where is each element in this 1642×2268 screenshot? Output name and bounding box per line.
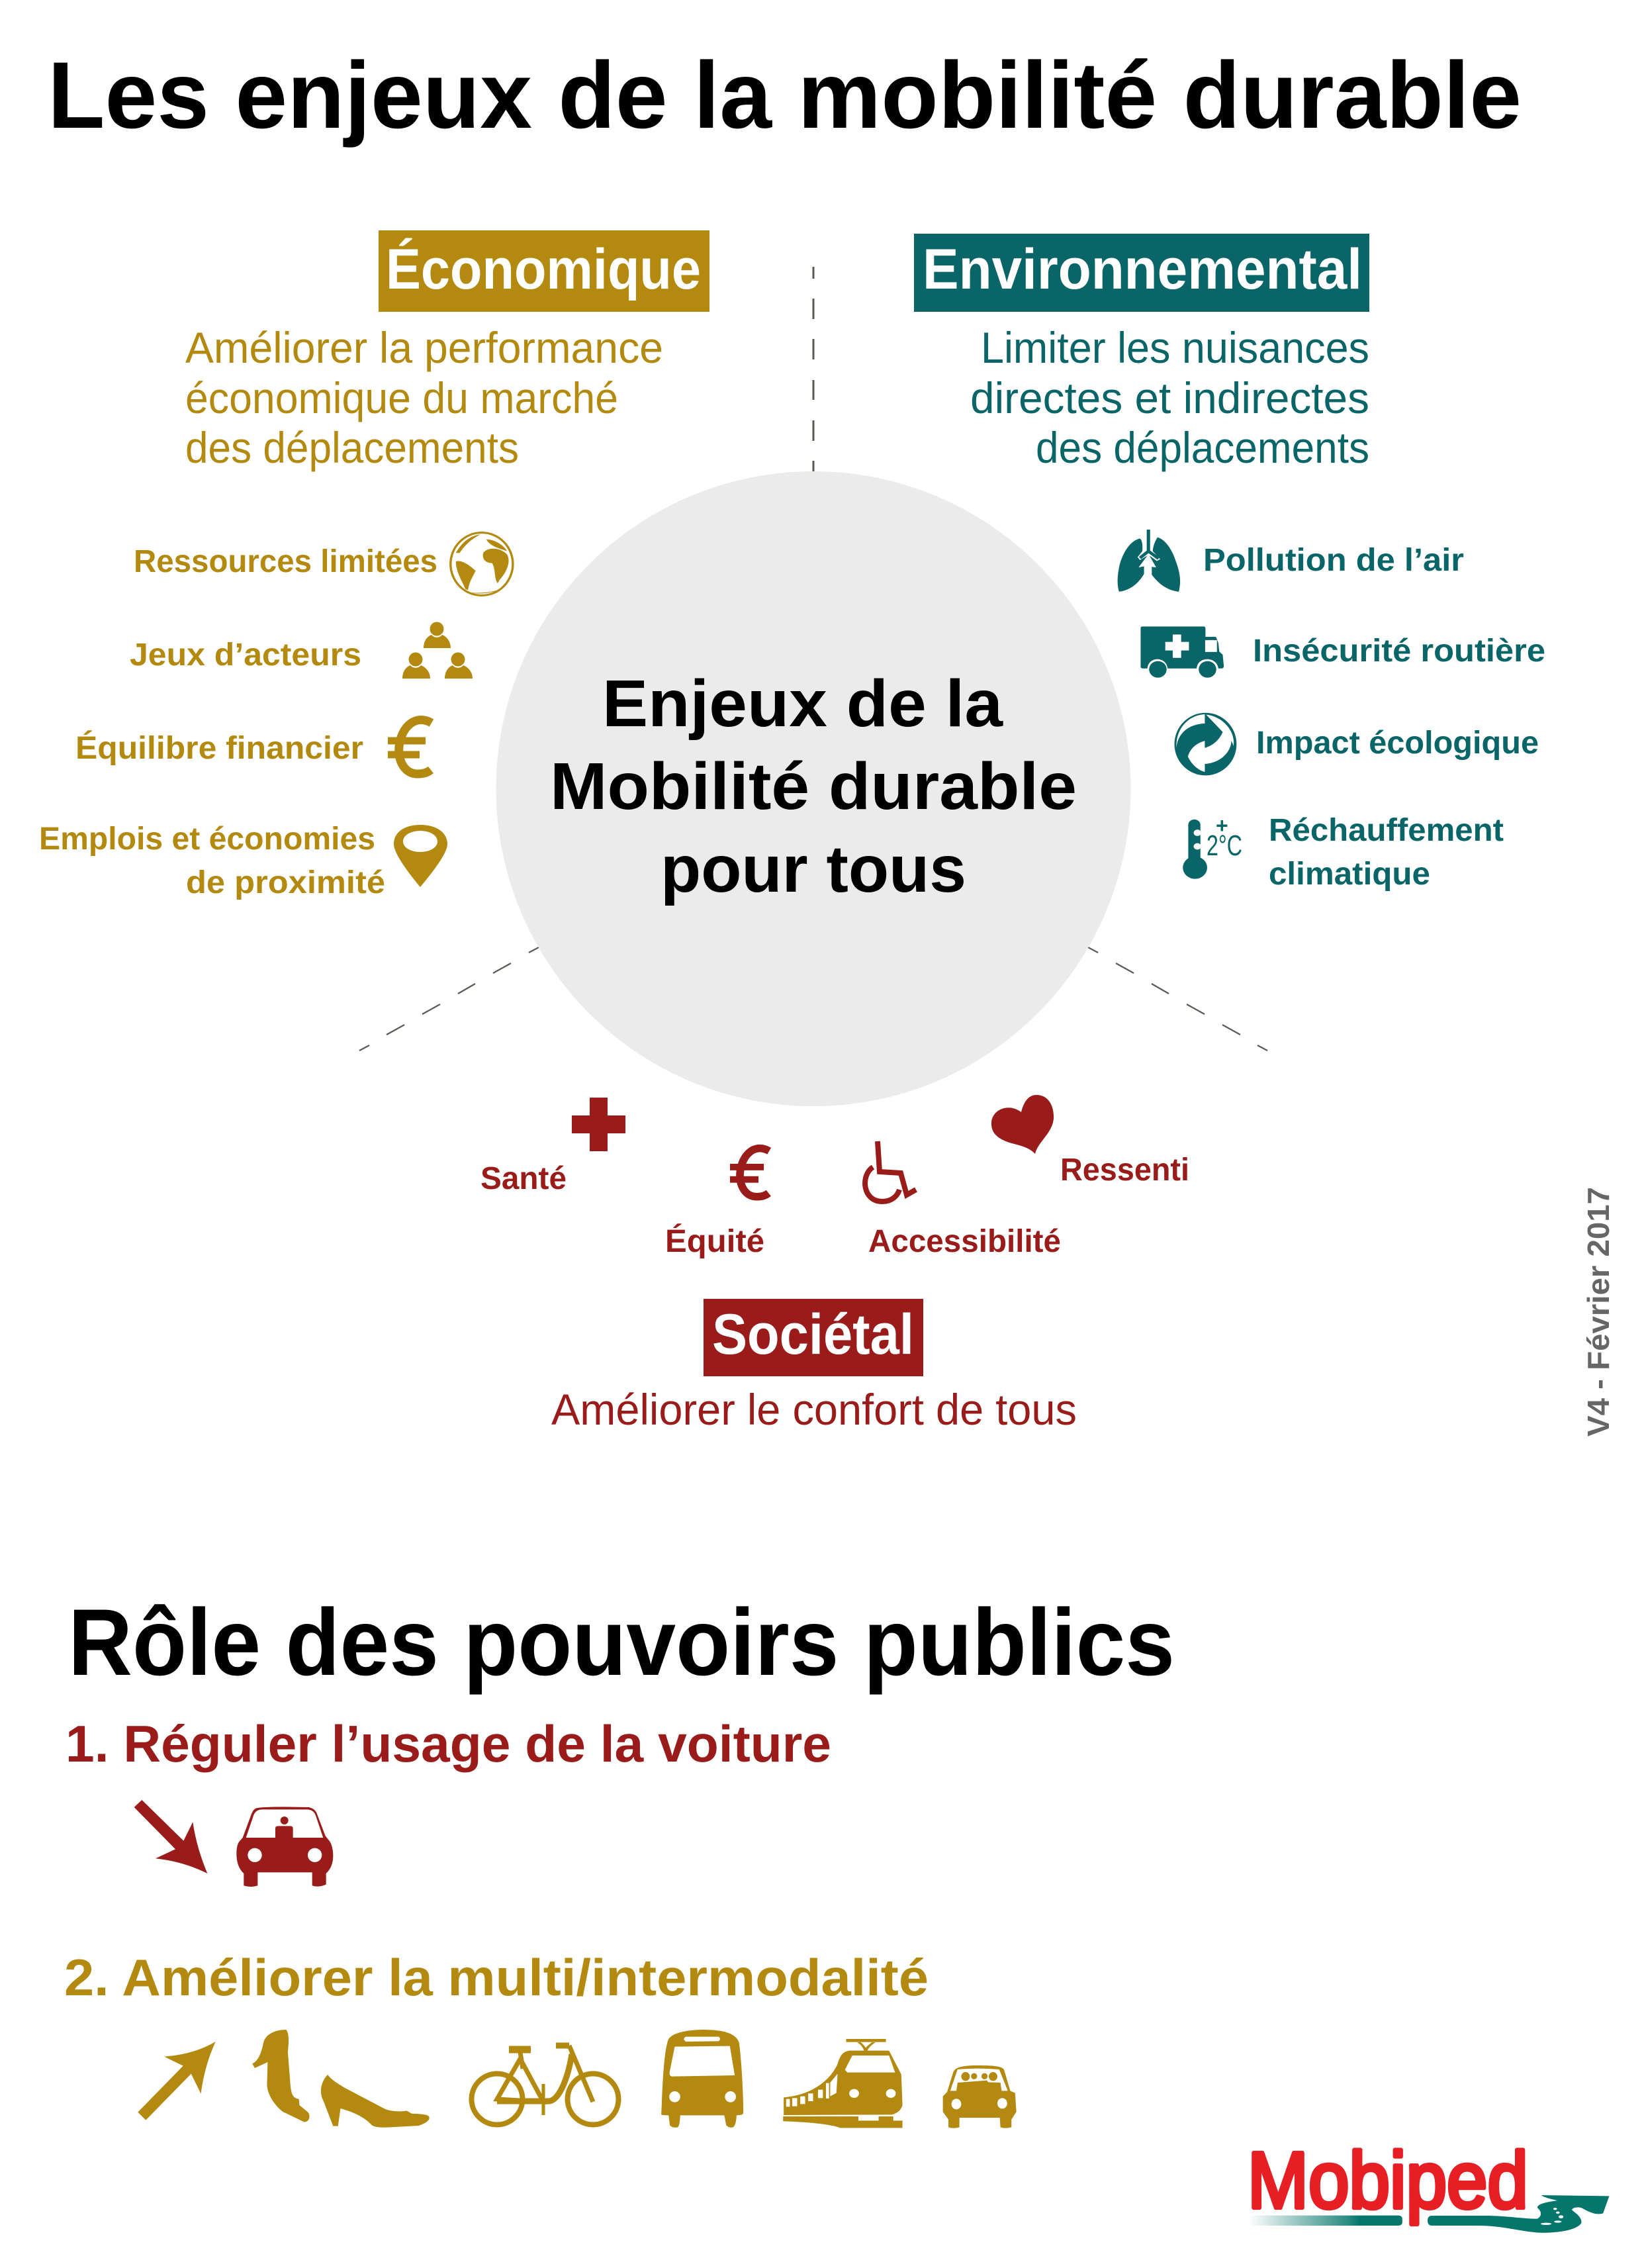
text: objectif environnemental: des déplacements <box>1036 423 1369 472</box>
item: réchauffement climatique <box>1183 813 1504 892</box>
item: équité <box>665 1149 769 1259</box>
central circle: Enjeux de la <box>602 667 1003 741</box>
item: jeux d'acteurs: Jeux d’acteurs <box>130 638 361 673</box>
icon: car <box>236 1807 333 1887</box>
heading: Environnemental: Environnemental <box>923 238 1362 301</box>
item: réchauffement climatique: climatique <box>1269 857 1430 892</box>
text: objectif environnemental: directes et indirectes <box>970 373 1369 422</box>
icon: bus <box>661 2030 743 2128</box>
subheading 2: 2. Améliorer la multi/intermodalité <box>64 1948 929 2007</box>
item: réchauffement climatique: Réchauffement <box>1269 813 1504 848</box>
icon: globe <box>451 533 513 595</box>
icon: pin <box>394 825 447 887</box>
version note: V4 - Février 2017 <box>1581 1187 1616 1437</box>
item: pollution de l'air <box>1118 530 1464 592</box>
logo: Mobiped: Mobiped <box>1248 2136 1528 2225</box>
panel: sociétal <box>480 1095 1189 1434</box>
item: emplois: de proximité <box>186 865 385 900</box>
icons: transport modes <box>138 2030 1017 2128</box>
text: objectif économique <box>185 323 663 472</box>
item: accessibilité <box>865 1141 1061 1259</box>
logo: Mobiped <box>1248 2136 1609 2233</box>
icon: bicycle <box>471 2046 618 2125</box>
icon: down arrow <box>134 1800 207 1873</box>
icon: cross <box>572 1098 625 1151</box>
section: réguler la voiture <box>66 1715 831 1887</box>
icon: shared car <box>943 2065 1017 2128</box>
item: emplois: Emplois et économies <box>39 822 375 857</box>
panel: environnemental <box>914 234 1545 892</box>
item: ressenti <box>991 1095 1189 1188</box>
item: impact écologique: Impact écologique <box>1256 726 1539 761</box>
heading: Sociétal: Sociétal <box>712 1303 914 1366</box>
icon: euro <box>730 1149 769 1197</box>
central circle <box>496 471 1130 1106</box>
item: accessibilité: Accessibilité <box>868 1224 1061 1259</box>
icon: euro <box>388 720 432 774</box>
item: équilibre financier <box>75 720 432 774</box>
section: multimodalité <box>64 1948 1017 2128</box>
icon: recycling dot <box>1174 713 1236 775</box>
text: objectif économique: des déplacements <box>185 423 519 472</box>
item: emplois <box>39 822 447 900</box>
item: ressenti: Ressenti <box>1060 1153 1189 1188</box>
item: insécurité routière: Insécurité routière <box>1253 634 1545 669</box>
icons: arrow and car <box>134 1800 333 1887</box>
icon: heeled shoe <box>321 2075 430 2128</box>
text: objectif économique: économique du marché <box>185 373 618 422</box>
icon: people <box>402 622 473 679</box>
item: pollution de l'air: Pollution de l’air <box>1203 543 1464 578</box>
item: équité: Équité <box>665 1223 764 1259</box>
item: santé <box>480 1098 625 1196</box>
icon: wheelchair <box>865 1141 916 1202</box>
icon: thermometer: + <box>1216 814 1228 837</box>
item: équilibre financier: Équilibre financier <box>75 730 363 766</box>
icon: heart <box>991 1095 1054 1154</box>
heading: rôle des pouvoirs publics: Rôle des pouvoirs publics <box>68 1590 1175 1695</box>
subheading 1: 1. Réguler l’usage de la voiture <box>66 1715 831 1773</box>
item: impact écologique <box>1174 713 1539 775</box>
title: Les enjeux de la mobilité durable <box>48 43 1522 148</box>
icon: thermometer <box>1183 814 1242 879</box>
icon: up arrow <box>138 2042 216 2120</box>
text: objectif environnemental: Limiter les nuisances <box>981 323 1369 372</box>
item: insécurité routière <box>1140 626 1545 678</box>
text: objectif économique: Améliorer la performance <box>185 323 663 372</box>
item: ressources limitées <box>134 533 513 595</box>
icon: boot <box>252 2030 310 2122</box>
central circle: Mobilité durable <box>550 749 1077 824</box>
item: ressources limitées: Ressources limitées <box>134 544 437 579</box>
item: santé: Santé <box>480 1161 567 1196</box>
icon: tram <box>783 2039 903 2128</box>
icon: lungs <box>1118 530 1180 592</box>
icon: ambulance <box>1140 626 1224 678</box>
text: objectif sociétal: Améliorer le confort de tous <box>551 1385 1077 1434</box>
icon: thermometer: 2°C <box>1207 829 1242 862</box>
central circle: pour tous <box>661 832 966 906</box>
text: objectif environnemental <box>970 323 1369 472</box>
heading: Économique: Économique <box>386 238 701 301</box>
item: jeux d'acteurs <box>130 622 473 679</box>
panel: économique <box>39 230 709 900</box>
